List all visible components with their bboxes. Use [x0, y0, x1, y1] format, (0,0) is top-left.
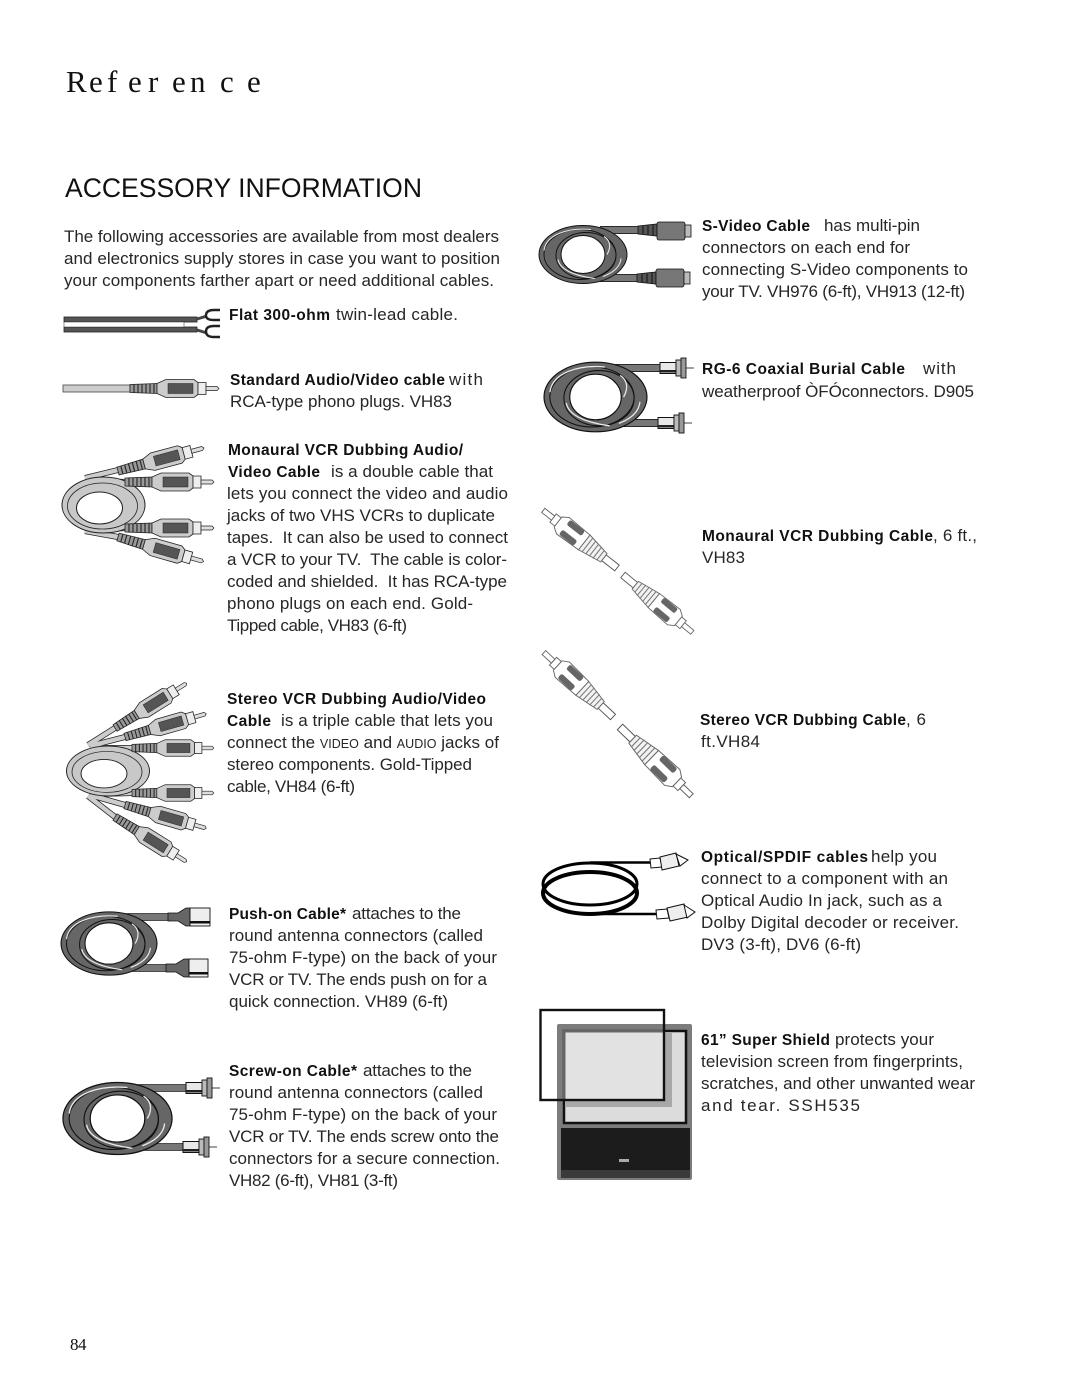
text: monaural vcr dubbing audio/video cable: lets you connect the video and audio: [227, 484, 508, 503]
text: push-on cable: VCR or TV. The ends push on for a: [229, 970, 488, 989]
text: stereo vcr dubbing audio/video cable: is a triple cable that lets you: [281, 711, 493, 730]
text: monaural vcr dubbing audio/video cable: [226, 442, 508, 635]
icon: flat twin-lead cable: [64, 310, 220, 337]
text: monaural vcr dubbing cable: Monaural VCR Dubbing Cable: [702, 528, 933, 545]
text: screw-on cable: VCR or TV. The ends screw onto the: [229, 1127, 499, 1146]
text: 61 inch super shield: and tear. SSH535: [701, 1096, 860, 1115]
icon: standard audio/video cable: [63, 380, 219, 398]
text: monaural vcr dubbing audio/video cable: phono plugs on each end. Gold-: [227, 594, 473, 613]
text: s-video cable: connecting S-Video components to: [702, 260, 968, 279]
icon: optical cable: [543, 853, 695, 921]
text: screw-on cable: [229, 1061, 500, 1190]
text: 61 inch super shield: protects your: [835, 1030, 934, 1049]
text: monaural vcr dubbing audio/video cable: coded and shielded. It has RCA-type: [227, 572, 507, 591]
text: standard audio/video cable: Standard Audio/Video cable: [230, 372, 445, 389]
text: push-on cable: Push-on Cable*: [229, 906, 347, 923]
text: stereo vcr dubbing cable: [700, 710, 926, 751]
text: screw-on cable: round antenna connectors (called: [229, 1083, 483, 1102]
intro text block: The following accessories are available from most dealers: [64, 227, 499, 246]
text: monaural vcr dubbing audio/video cable: tapes. It can also be used to connect: [227, 528, 508, 547]
icon: stereo dubbing cable coil: [66, 676, 214, 869]
text: flat 300-ohm: [229, 305, 458, 324]
text: optical/spdif cables: help you: [871, 847, 937, 866]
text: s-video cable: [702, 216, 968, 301]
title: Reference: [66, 64, 261, 99]
text: push-on cable: 75-ohm F-type) on the back of your: [229, 948, 497, 967]
text: standard audio/video cable: [230, 370, 483, 411]
text: monaural vcr dubbing cable: , 6 ft.,: [933, 526, 977, 545]
text: push-on cable: quick connection. VH89 (6-ft): [229, 992, 448, 1011]
text: stereo vcr dubbing cable: Stereo VCR Dubbing Cable: [700, 712, 906, 729]
text: flat 300-ohm: twin-lead cable.: [336, 305, 458, 324]
text: monaural vcr dubbing audio/video cable: Monaural VCR Dubbing Audio/: [228, 442, 464, 459]
text: push-on cable: round antenna connectors (called: [229, 926, 483, 945]
text: optical/spdif cables: DV3 (3-ft), DV6 (6-ft): [701, 935, 861, 954]
text: rg-6 coaxial burial cable: weatherproof ÒFÓconnectors. D905: [701, 382, 974, 401]
text: optical/spdif cables: connect to a component with an: [701, 869, 948, 888]
text: monaural vcr dubbing audio/video cable: is a double cable that: [331, 462, 493, 481]
text: stereo vcr dubbing audio/video cable: Stereo VCR Dubbing Audio/Video: [227, 691, 486, 708]
text: rg-6 coaxial burial cable: with: [922, 359, 956, 378]
text: s-video cable: S-Video Cable: [702, 218, 810, 235]
icon: s-video cable: [539, 222, 691, 287]
text: optical/spdif cables: Dolby Digital decoder or receiver.: [701, 913, 959, 932]
text: optical/spdif cables: [701, 847, 959, 954]
text: stereo vcr dubbing audio/video cable: cable, VH84 (6-ft): [227, 777, 355, 796]
text: screw-on cable: connectors for a secure connection.: [229, 1149, 500, 1168]
text: s-video cable: has multi-pin: [824, 216, 920, 235]
page number: 84: [70, 1335, 87, 1354]
text: push-on cable: attaches to the: [352, 904, 461, 923]
text: flat 300-ohm: Flat 300-ohm: [229, 307, 330, 324]
text: monaural vcr dubbing audio/video cable: jacks of two VHS VCRs to duplicate: [226, 506, 495, 525]
text: 61 inch super shield: [701, 1030, 975, 1115]
text: stereo vcr dubbing audio/video cable: stereo components. Gold-Tipped: [227, 755, 472, 774]
text: push-on cable: [229, 904, 497, 1011]
heading: accessory information: ACCESSORY INFORMATION: [65, 173, 422, 203]
text: s-video cable: connectors on each end for: [702, 238, 910, 257]
text: optical/spdif cables: Optical/SPDIF cables: [701, 849, 868, 866]
text: screw-on cable: VH82 (6-ft), VH81 (3-ft): [229, 1171, 398, 1190]
icon: monaural vcr dubbing cable plugs: [537, 502, 699, 640]
text: monaural vcr dubbing cable: VH83: [702, 548, 745, 567]
text: stereo vcr dubbing audio/video cable: [227, 691, 499, 796]
text: screw-on cable: Screw-on Cable*: [229, 1063, 358, 1080]
text: stereo vcr dubbing cable: , 6: [906, 710, 926, 729]
text: monaural vcr dubbing audio/video cable: a VCR to your TV. The cable is color-: [227, 550, 507, 569]
text: rg-6 coaxial burial cable: [701, 359, 974, 401]
text: stereo vcr dubbing audio/video cable: Cable: [227, 713, 271, 730]
text: optical/spdif cables: Optical Audio In jack, such as a: [701, 891, 943, 910]
intro text block: and electronics supply stores in case you want to position: [64, 249, 500, 268]
text: 61 inch super shield: television screen from fingerprints,: [701, 1052, 963, 1071]
text: rg-6 coaxial burial cable: RG-6 Coaxial Burial Cable: [702, 361, 905, 378]
text: stereo vcr dubbing audio/video cable: connect the VIDEO and AUDIO jacks of: [227, 733, 499, 752]
text: screw-on cable: attaches to the: [363, 1061, 472, 1080]
icon: stereo vcr dubbing cable plugs: [537, 645, 699, 804]
text: 61 inch super shield: scratches, and other unwanted wear: [701, 1074, 975, 1093]
text: monaural vcr dubbing cable: [702, 526, 977, 567]
text: standard audio/video cable: with: [448, 370, 483, 389]
icon: rg-6 coaxial cable: [544, 358, 694, 433]
text: screw-on cable: 75-ohm F-type) on the back of your: [229, 1105, 497, 1124]
text: standard audio/video cable: RCA-type phono plugs. VH83: [230, 392, 452, 411]
intro text block: [64, 227, 500, 290]
text: 61 inch super shield: 61” Super Shield: [701, 1032, 830, 1049]
icon: monaural dubbing cable coil: [62, 439, 214, 570]
icon: push-on cable: [61, 908, 210, 977]
icon: television with super shield: [540, 1010, 692, 1180]
icon: screw-on cable: [63, 1078, 220, 1157]
text: s-video cable: your TV. VH976 (6-ft), VH913 (12-ft): [702, 282, 965, 301]
text: monaural vcr dubbing audio/video cable: Video Cable: [228, 464, 320, 481]
intro text block: your components farther apart or need additional cables.: [64, 271, 494, 290]
text: monaural vcr dubbing audio/video cable: Tipped cable, VH83 (6-ft): [227, 616, 407, 635]
text: stereo vcr dubbing cable: ft.VH84: [701, 732, 760, 751]
